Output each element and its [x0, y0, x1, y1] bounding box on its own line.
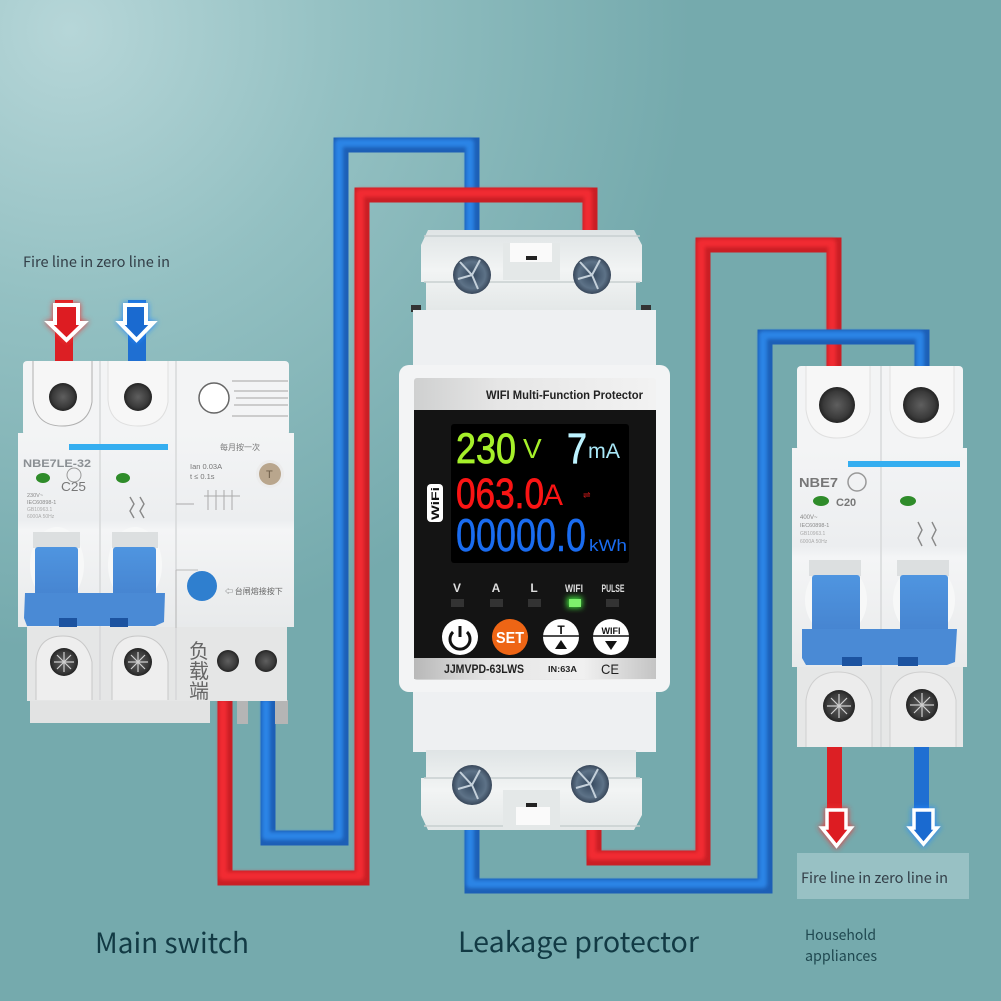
model line: CE	[601, 661, 619, 677]
right breaker: GB10963.1	[800, 531, 826, 537]
right breaker: IEC60898-1	[800, 523, 829, 529]
indicator LEDs	[451, 597, 619, 608]
main switch breaker: Ian 0.03A	[190, 462, 222, 471]
display screen: mA	[588, 440, 620, 463]
WiFi badge	[427, 484, 443, 522]
right breaker: NBE7	[799, 475, 838, 490]
display screen: 7	[567, 425, 587, 473]
blue wire: main switch to protector top	[266, 143, 472, 838]
model line: IN:63A	[548, 664, 577, 674]
main switch breaker: 载	[189, 655, 209, 684]
main switch breaker: 6000A 50Hz	[27, 514, 55, 520]
model line: JJMVPD-63LWS	[444, 664, 524, 676]
label: household appliances	[805, 924, 877, 966]
main switch breaker: IEC60898-1	[27, 500, 56, 506]
label: leakage protector: Leakage protector	[458, 921, 699, 961]
multi-function protector	[399, 230, 670, 830]
red wire: main switch to protector top	[223, 193, 590, 878]
red wire: protector bottom to right breaker	[592, 243, 834, 858]
label: household appliances: appliances	[805, 945, 877, 966]
label: main switch: Main switch	[95, 922, 249, 962]
indicator labels: PULSE	[602, 583, 624, 595]
main switch breaker: ⇦ 台闸熔接按下	[225, 586, 283, 597]
top clear terminal cover	[421, 230, 642, 310]
main switch breaker: 负	[189, 635, 209, 664]
indicator labels: A	[492, 581, 501, 595]
control buttons	[442, 619, 629, 655]
display screen: 00000.0	[456, 509, 586, 561]
right breaker: C20	[836, 497, 856, 509]
right breaker: 6000A 50Hz	[800, 539, 828, 545]
display screen: A	[543, 479, 563, 512]
main switch breaker: 230V~	[27, 493, 43, 499]
right breaker	[792, 366, 967, 747]
display screen: 063.0	[456, 470, 544, 518]
main switch breaker	[18, 361, 294, 724]
display screen: ⇌	[583, 490, 591, 500]
display screen	[451, 424, 629, 563]
main switch breaker: GB10963.1	[27, 507, 53, 513]
indicator labels: V	[453, 581, 461, 595]
control buttons: T	[557, 623, 565, 637]
main switch breaker: t ≤ 0.1s	[190, 472, 215, 481]
WiFi badge: WiFi	[430, 487, 442, 520]
display screen: 230	[456, 425, 516, 473]
display screen: kWh	[589, 536, 627, 555]
main switch breaker: C25	[61, 479, 86, 494]
blue wire: protector bottom to right breaker	[470, 335, 922, 886]
main switch breaker: 每月按一次	[220, 442, 260, 453]
display screen: V	[523, 433, 542, 464]
input wires and arrows	[49, 300, 153, 365]
label: household appliances: Household	[805, 924, 876, 945]
model line	[444, 661, 619, 677]
right breaker: 400V~	[800, 515, 818, 521]
output wires and arrows	[822, 747, 937, 846]
callout box: fire line in zero line in (right): Fire line in zero line in	[801, 867, 948, 888]
indicator labels: L	[530, 581, 538, 595]
callout box: fire line in zero line in (right)	[797, 853, 969, 899]
indicator labels	[453, 581, 624, 595]
main switch breaker: T	[266, 469, 273, 481]
control buttons: SET	[496, 630, 524, 647]
main switch breaker: NBE7LE-32	[23, 458, 91, 470]
indicator labels: WIFI	[565, 583, 583, 595]
bottom clear terminal cover	[421, 750, 642, 830]
label: fire line in zero line in (left): Fire line in zero line in	[23, 251, 170, 272]
header label: WIFI Multi-Function Protector	[486, 388, 643, 402]
main switch breaker: 端	[189, 675, 209, 704]
control buttons: WIFI	[602, 626, 620, 636]
